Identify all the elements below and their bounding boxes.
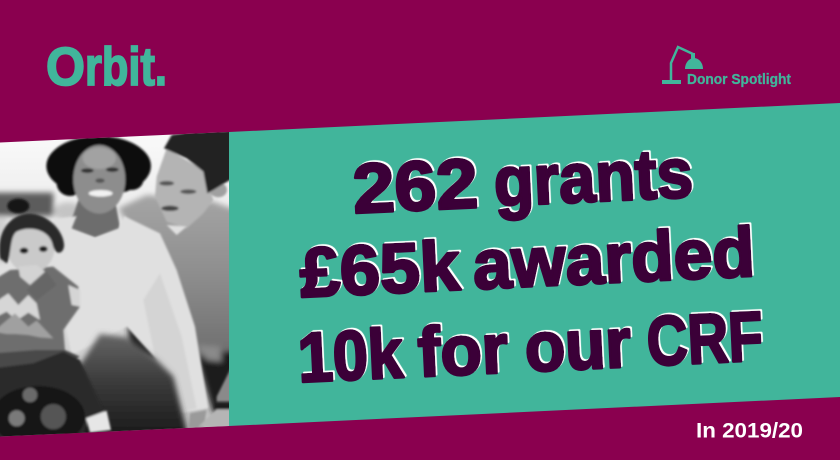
child jeans [0,352,105,436]
woman's neck [68,200,121,238]
logo: Orbit: O [46,37,85,97]
panel: teal band [229,103,840,426]
floral cushion [0,386,84,436]
man's head [155,148,213,228]
woman's jeans [58,330,190,434]
stat: £65k awarded: awarded [471,213,756,304]
child sock [86,411,111,433]
icon: desk lamp [662,47,703,84]
stat: 10k for our CRF: CRF [645,297,765,380]
stat: 10k for our CRF: our [523,304,633,386]
stat: 262 grants: grants [492,134,694,221]
stat: £65k awarded [298,213,756,312]
stat: £65k awarded: £65k [298,227,462,312]
man's shirt [117,192,229,359]
stat: 10k for our CRF: for [416,309,510,391]
dark underlayers [124,326,156,360]
child head [7,227,56,270]
stat: 262 grants [351,134,694,228]
photo: family [0,132,229,436]
woman's sweater [50,216,208,413]
headline stats [296,134,765,397]
woman's face [73,145,125,214]
stat: 262 grants: 262 [351,144,480,228]
date label: In 2019/20 [696,420,803,442]
stat: 10k for our CRF [296,297,765,397]
logo: Orbit: rbit. [85,37,167,97]
stat: 10k for our CRF: 10k [296,314,405,397]
woman's hair [46,136,151,196]
child sweater [0,267,80,360]
hands [188,410,207,428]
label: Donor Spotlight: Donor Spotlight [687,72,791,88]
logo: Orbit [46,37,167,97]
